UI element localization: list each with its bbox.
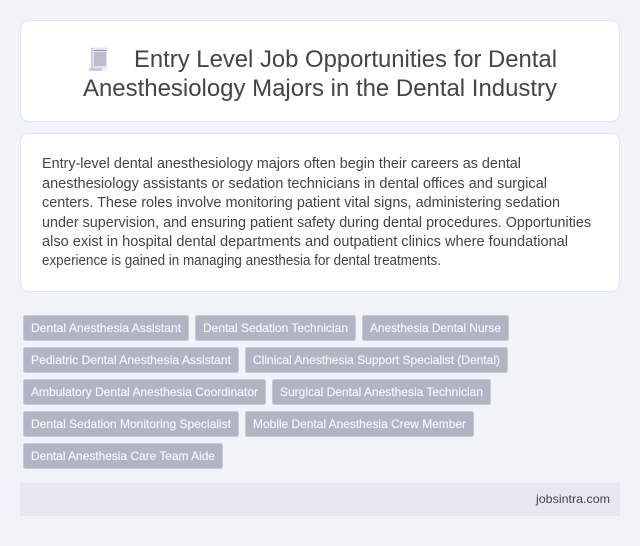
text block: description: experience is gained in managing anesthesia for dental treatments. [42, 253, 441, 269]
tag: Surgical Dental Anesthesia Technician [280, 385, 483, 399]
tag: Mobile Dental Anesthesia Crew Member [253, 417, 466, 431]
title: Anesthesiology Majors in the Dental Industry [83, 75, 557, 102]
footer source text: jobsintra.com [535, 492, 610, 506]
tag: Clinical Anesthesia Support Specialist (Dental) [253, 353, 500, 367]
tag [24, 348, 238, 372]
tag: Dental Sedation Monitoring Specialist [31, 417, 232, 431]
tag list [24, 316, 508, 468]
tag: Anesthesia Dental Nurse [370, 321, 501, 335]
panel: title card [20, 20, 620, 122]
text block: description [42, 156, 591, 269]
title [83, 46, 557, 102]
tag [24, 380, 266, 404]
text block: description: also exist in hospital dental departments and outpatient clinics where foundational [42, 234, 568, 250]
tag [272, 380, 490, 404]
title: Entry Level Job Opportunities for Dental [134, 46, 557, 73]
tag [246, 348, 508, 372]
icon: document scroll [89, 47, 108, 71]
text block: description: Entry-level dental anesthesiology majors often begin their careers as dental [42, 156, 521, 172]
tag: Pediatric Dental Anesthesia Assistant [31, 353, 232, 367]
text block: description: anesthesiology assistants or sedation technicians in dental offices and surgical [42, 176, 547, 192]
tag [362, 316, 508, 340]
tag [24, 412, 238, 436]
tag [24, 316, 188, 340]
tag: Dental Anesthesia Care Team Aide [31, 449, 215, 463]
tag: Dental Sedation Technician [203, 321, 348, 335]
footer bar [20, 483, 620, 516]
tag [196, 316, 356, 340]
text block: description: centers. These roles involve monitoring patient vital signs, administering sedation [42, 195, 560, 211]
tag [246, 412, 474, 436]
tag: Ambulatory Dental Anesthesia Coordinator [31, 385, 258, 399]
tag: Dental Anesthesia Assistant [31, 321, 182, 335]
tag [24, 444, 222, 468]
text block: description: under supervision, and ensuring patient safety during dental procedures. Opportunities [42, 215, 591, 231]
panel: description card [20, 134, 620, 292]
